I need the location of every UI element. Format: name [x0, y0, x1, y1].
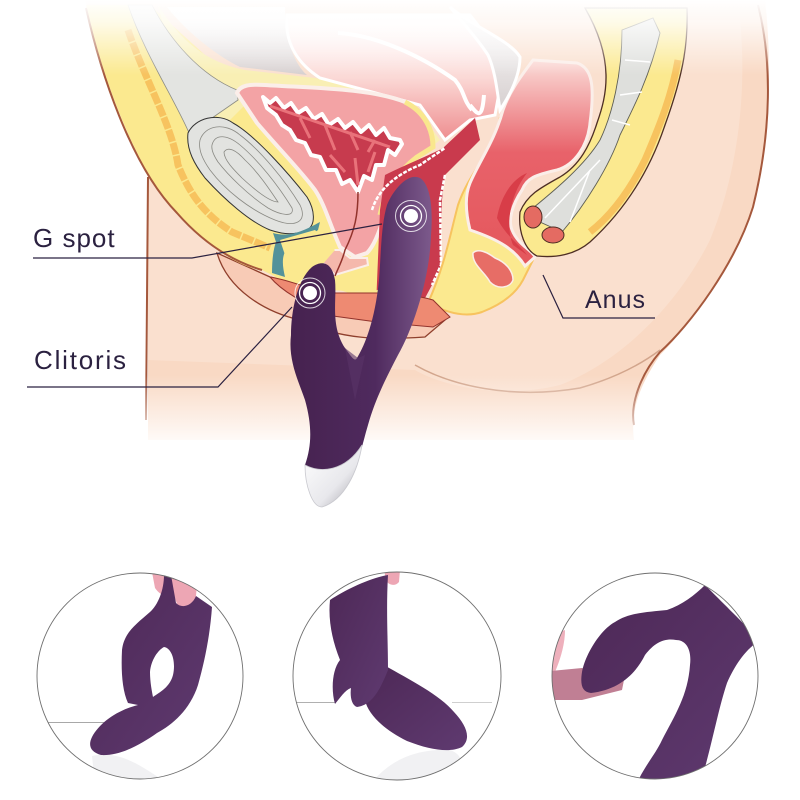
- fallopian tube and folds: [338, 33, 484, 113]
- label: Clitoris: [27, 307, 292, 387]
- uterine cavity: [263, 97, 402, 192]
- sacrum yellow fat: [520, 8, 687, 257]
- top pink abdominal mass: [287, 15, 505, 140]
- upper arm and flap: [329, 575, 388, 707]
- lower buttock crease: [415, 350, 660, 392]
- anal lobes: [524, 206, 564, 243]
- circle outline: [552, 573, 758, 779]
- urethra: [272, 222, 320, 277]
- label: G spot: [33, 223, 382, 258]
- bladder: [188, 117, 313, 234]
- pubic fat layer: [86, 5, 400, 294]
- top fade: [80, 0, 780, 75]
- finger: [384, 572, 400, 585]
- finger: [552, 668, 624, 700]
- rectum: [466, 60, 592, 266]
- outer labia skin: [217, 253, 445, 338]
- device: [581, 585, 760, 785]
- button: clitoris: [295, 278, 325, 308]
- floor line: [46, 722, 104, 723]
- bottom fade: [130, 375, 650, 450]
- button: G spot: [396, 200, 426, 232]
- circle outline: [37, 573, 243, 779]
- floor line right: [452, 702, 492, 703]
- sacrum gray tissue: [533, 18, 660, 232]
- device in position: [290, 177, 432, 507]
- vaginal fold shape: [322, 250, 368, 275]
- circle photo 1: [37, 572, 243, 785]
- device: [90, 575, 212, 755]
- floor reflection: [92, 755, 158, 778]
- skin outline: [146, 5, 768, 425]
- finger top: [552, 630, 565, 671]
- label: G spot: G spot: [33, 223, 116, 253]
- canal line: [335, 192, 358, 276]
- floor line left: [296, 702, 336, 703]
- circle photo 3: [540, 573, 760, 785]
- gray bladder band: [128, 5, 238, 135]
- rectal pocket: [473, 251, 513, 287]
- orange fat edge: [128, 30, 270, 248]
- uterus yellow lining: [380, 102, 433, 215]
- device body: [290, 177, 432, 473]
- sacrum cell lines: [545, 60, 650, 222]
- vaginal canal wall: [375, 118, 480, 345]
- pelvic gray cavity: [167, 7, 307, 75]
- label: Clitoris: Clitoris: [34, 345, 128, 375]
- circle outline: [293, 572, 501, 780]
- yellow lower band: [280, 230, 420, 310]
- device base sheen: [345, 348, 365, 400]
- orange band: [590, 60, 678, 232]
- perineal red strip: [270, 277, 450, 327]
- perineal body yellow: [428, 117, 533, 314]
- abdominal brown outline: [86, 8, 262, 270]
- canal white edge: [372, 148, 445, 285]
- gray rectal pouch: [450, 7, 520, 110]
- fingers: [152, 574, 196, 606]
- lower arm: [365, 665, 467, 750]
- cavity ribs: [270, 106, 390, 185]
- rectal inner red: [497, 173, 527, 255]
- circle photo 2: [293, 570, 501, 785]
- lighter inner skin: [100, 20, 742, 391]
- skin body: [85, 0, 769, 440]
- label: Anus: [543, 275, 655, 318]
- abdominal pale yellow band: [158, 5, 440, 160]
- label: Anus: Anus: [585, 286, 646, 314]
- clear glass tip: [305, 445, 362, 507]
- anatomical cross-section diagram: [80, 0, 780, 450]
- floor reflection: [376, 750, 460, 780]
- uterus: [237, 85, 433, 257]
